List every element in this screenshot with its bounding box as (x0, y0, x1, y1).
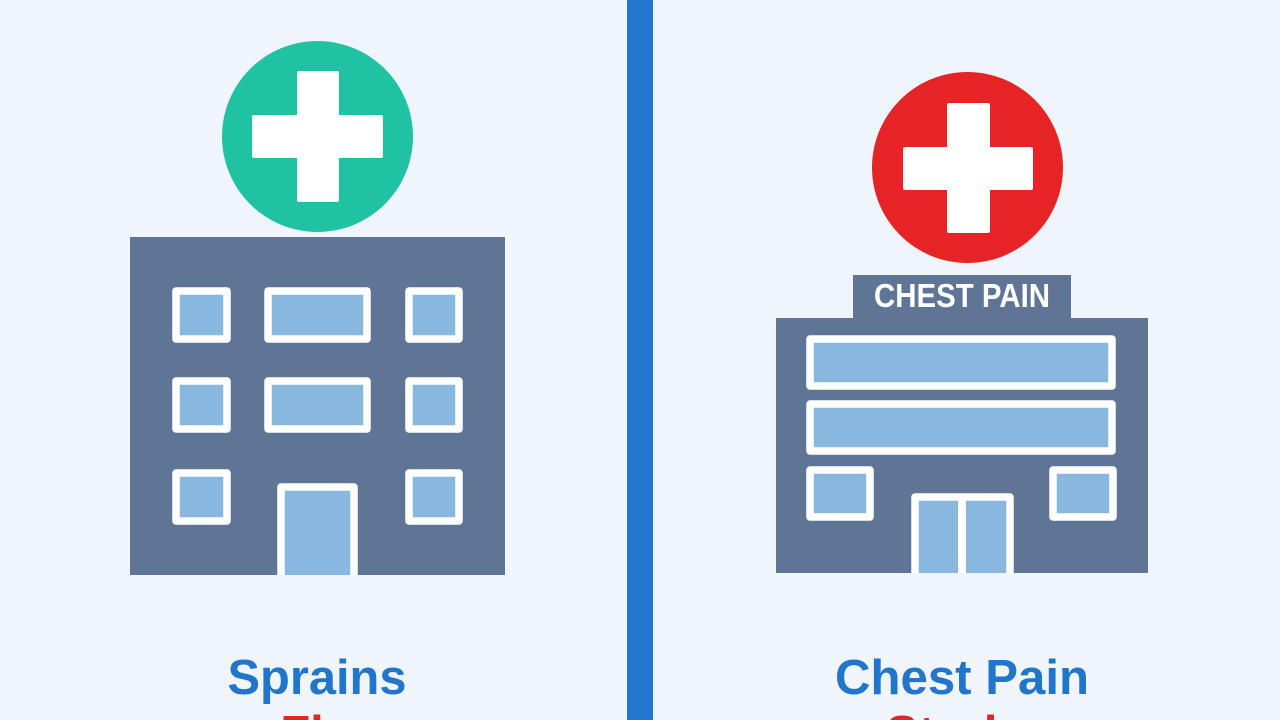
sign text: CHEST PAIN: CHEST PAIN (874, 277, 1050, 314)
panel: right emergency room (776, 72, 1148, 720)
icon: green medical cross (222, 41, 413, 232)
panel: left urgent care (130, 41, 505, 720)
building: left clinic (130, 237, 505, 575)
icon: red medical cross (872, 72, 1063, 263)
label: Chest Pain: Chest Pain (835, 651, 1089, 705)
label: Sprains: Sprains (228, 651, 406, 705)
building: right hospital (776, 275, 1148, 573)
center divider (627, 0, 653, 720)
